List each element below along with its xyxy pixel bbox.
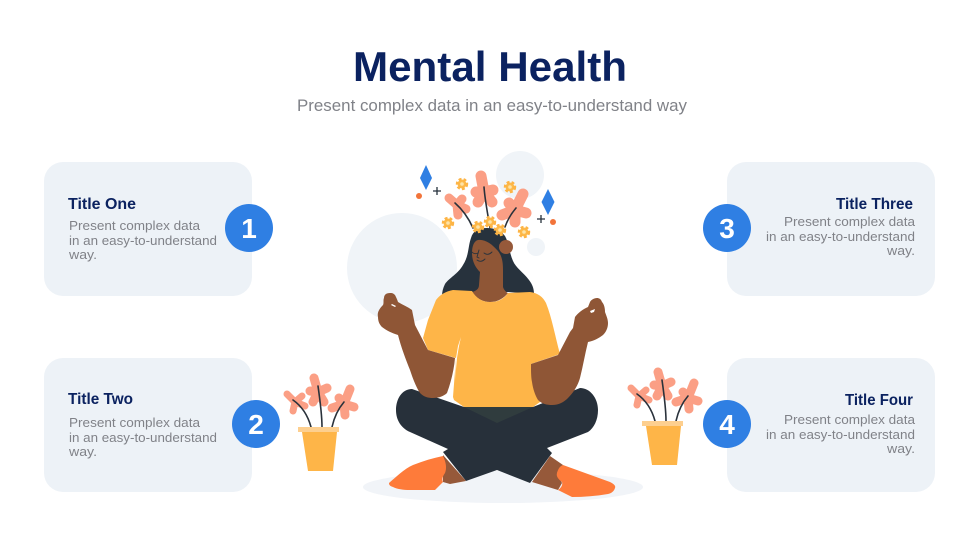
text block: title four: Present complex data	[784, 412, 916, 427]
right shoe	[557, 465, 615, 497]
background circles	[347, 151, 545, 323]
subtitle: Present complex data in an easy-to-understand way	[297, 96, 687, 115]
left hand glint	[391, 304, 396, 307]
text block: title two: in an easy-to-understand	[69, 430, 217, 445]
icon: left blue diamond	[420, 165, 432, 190]
number badge 4	[703, 400, 751, 448]
icon: plus signs	[433, 187, 545, 223]
icon: left plant pot	[287, 378, 354, 471]
panel: title two	[44, 358, 280, 492]
number badge 3: 3	[719, 213, 735, 244]
text block: title one	[68, 218, 217, 262]
text block: title four	[766, 412, 916, 456]
heading: title three: Title Three	[836, 196, 913, 213]
icon: head flowers	[444, 176, 528, 236]
panel: title one	[44, 162, 273, 296]
text block: title two: way.	[68, 444, 97, 459]
text block: title three: in an easy-to-understand	[766, 229, 915, 244]
text block: title one: Present complex data	[69, 218, 201, 233]
shirt	[423, 290, 560, 407]
white gap between sleeve and body	[455, 337, 461, 380]
left ankle	[443, 455, 466, 484]
panel: title four	[703, 358, 935, 492]
number badge 2	[232, 400, 280, 448]
text block: title two: Present complex data	[69, 415, 201, 430]
pants	[396, 388, 598, 483]
number badge 1	[225, 204, 273, 252]
heading: title four: Title Four	[845, 392, 913, 409]
text block: title two	[68, 415, 217, 459]
icon: right plant pot	[631, 372, 698, 465]
text block: title one: in an easy-to-understand	[69, 233, 217, 248]
heading: title one: Title One	[68, 196, 136, 213]
number badge 2: 2	[248, 409, 264, 440]
face and neck	[472, 240, 508, 302]
icon: right blue diamond	[542, 189, 554, 215]
left shoe	[389, 456, 446, 490]
text block: title three	[766, 214, 916, 258]
right hand glint	[590, 309, 595, 313]
text block: title three: way.	[886, 243, 915, 258]
illustration: meditating woman	[378, 228, 615, 497]
right ankle	[532, 456, 563, 490]
shirt hem shadow	[464, 407, 533, 423]
number badge 1: 1	[241, 213, 257, 244]
left arm	[378, 293, 455, 398]
icon: orange dots	[416, 193, 556, 225]
heading: title two: Title Two	[68, 391, 133, 408]
text block: title four: way.	[886, 441, 915, 456]
text block: title one: way.	[68, 247, 97, 262]
right arm	[531, 298, 608, 405]
number badge 3	[703, 204, 751, 252]
number badge 4: 4	[719, 409, 735, 440]
text block: title three: Present complex data	[784, 214, 916, 229]
hair	[442, 228, 534, 296]
ground shadow	[363, 471, 643, 503]
face details	[471, 250, 492, 261]
text block: title four: in an easy-to-understand	[766, 427, 915, 442]
title: Mental Health	[353, 43, 627, 90]
ear	[499, 240, 513, 254]
panel: title three	[703, 162, 935, 296]
